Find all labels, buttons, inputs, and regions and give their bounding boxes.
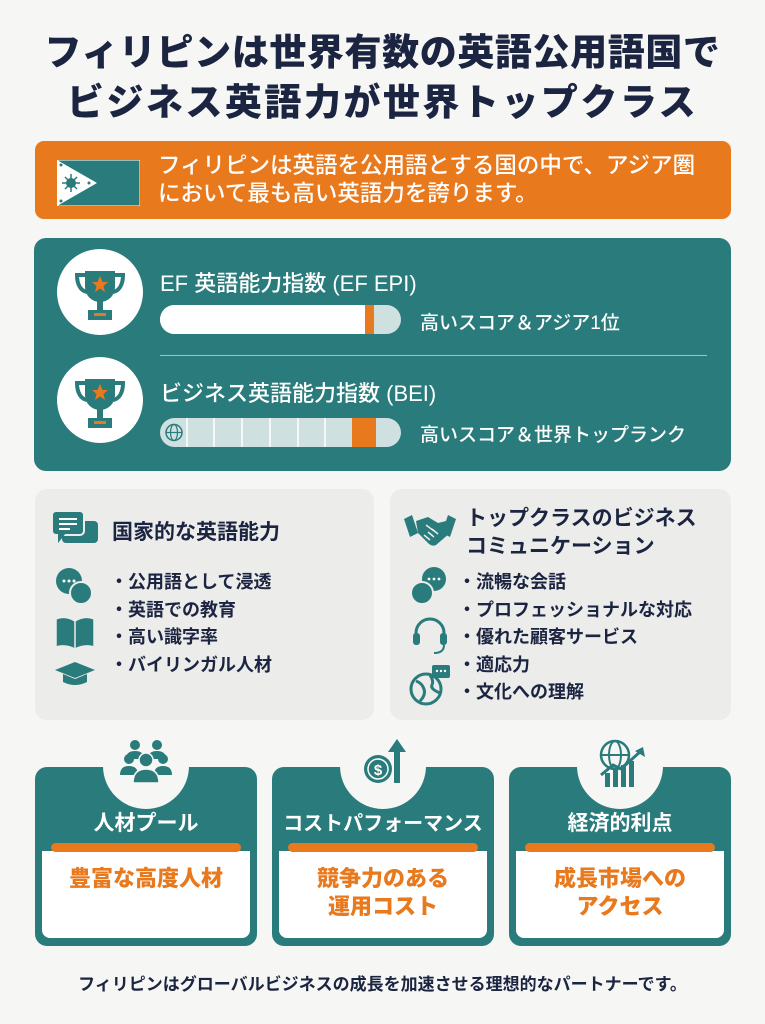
icon: coin with arrow: $ [374,762,383,779]
list items: ・文化への理解 [458,682,584,702]
card text: 競争力のある [317,866,449,891]
banner text: において最も高い英語力を誇ります。 [158,181,538,206]
heading: コミュニケーション [466,535,655,558]
card text: 成長市場への [554,866,686,891]
title: ビジネス英語力が世界トップクラス [67,82,698,123]
list items: ・適応力 [458,654,530,674]
card text [317,866,449,919]
icon: coin with arrow [364,739,406,783]
heading: EF EPI: EF 英語能力指数 (EF EPI) [160,271,417,296]
list items: ・プロフェッショナルな対応 [458,600,692,620]
title: フィリピンは世界有数の英語公用語国で [44,32,721,73]
card heading: コストパフォーマンス [283,813,483,835]
list items: ・バイリンガル人材 [110,654,272,674]
icons column [410,567,450,706]
card text: 運用コスト [328,894,438,919]
icon: people [120,740,172,782]
banner text: フィリピンは英語を公用語とする国の中で、アジア圏 [158,153,695,178]
list items: ・英語での教育 [110,600,236,620]
card: talent pool [35,767,257,946]
list items: ・優れた顧客サービス [458,627,638,647]
list items [458,572,692,702]
card text: 豊富な高度人材 [69,866,223,891]
card text [554,866,686,919]
title [44,32,721,123]
heading: トップクラスのビジネス [466,507,697,530]
label: EF rank: 高いスコア＆アジア1位 [420,313,620,334]
banner: intro [35,141,731,219]
icon: trophy 1 [57,249,143,335]
heading: 国家的な英語能力 [112,521,280,544]
icon: chat [53,512,98,543]
label: BEI rank: 高いスコア＆世界トップランク [420,425,686,446]
list items: ・公用語として浸透 [110,572,271,592]
panel: business communication [390,489,731,720]
banner text [158,153,695,206]
icon: handshake [404,515,456,546]
list items [110,572,272,674]
bar: BEI [160,418,401,447]
card text: アクセス [577,894,663,919]
list items: ・流暢な会話 [458,572,566,592]
heading [466,506,697,558]
icon: trophy 2 [57,357,143,443]
icons column [55,568,95,685]
icon: globe growth [600,740,645,787]
footer: フィリピンはグローバルビジネスの成長を加速させる理想的なパートナーです。 [78,975,687,994]
card heading: 人材プール [94,812,198,835]
heading: BEI: ビジネス英語能力指数 (BEI) [160,381,436,406]
card heading: 経済的利点 [568,812,672,835]
list items: ・高い識字率 [110,627,218,647]
icon: philippine flag [57,160,140,206]
panel: index scores [34,238,731,471]
bar: EF EPI [160,305,401,334]
card: economic advantage [509,767,731,946]
panel: national english ability [35,489,374,720]
card: cost performance [272,767,494,946]
